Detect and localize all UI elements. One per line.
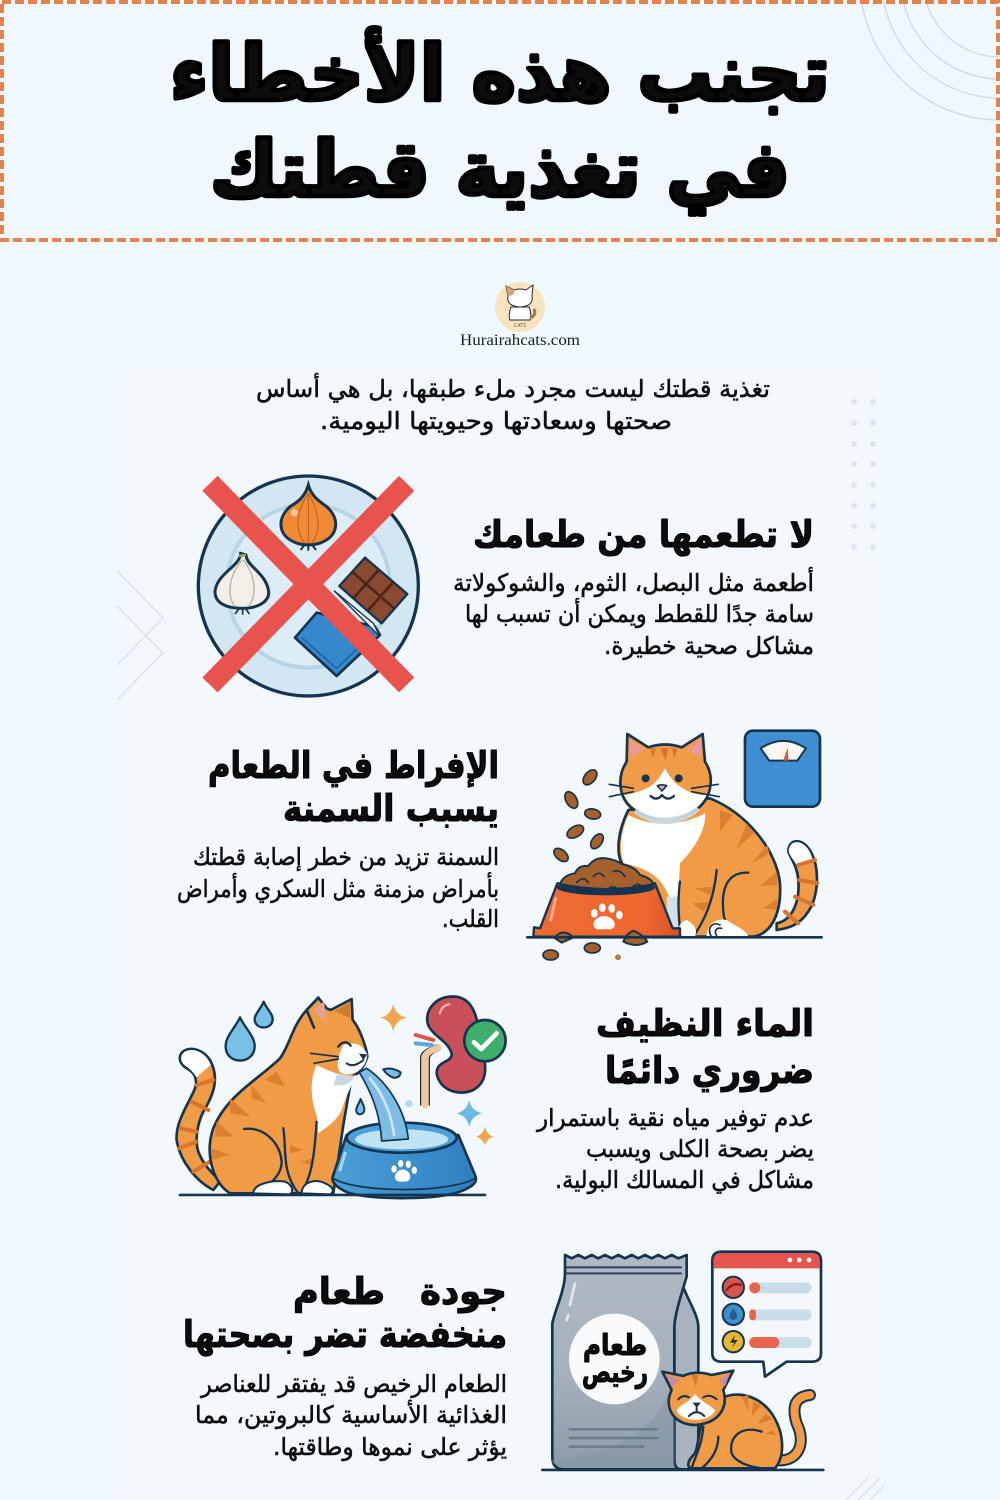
logo: CATS xyxy=(514,323,526,329)
floor line xyxy=(180,1191,485,1199)
panel 2: overfeeding text: السمنة تزيد من خطر إصابة قطتك xyxy=(193,843,499,872)
header banner with dashed border xyxy=(2,2,998,240)
cat tail xyxy=(777,841,817,930)
logo xyxy=(460,282,580,349)
panel 3: clean water text: مشاكل في المسالك البولية. xyxy=(555,1166,814,1194)
panel 3: clean water text: الماء النظيف xyxy=(596,1002,814,1045)
icon: garlic xyxy=(215,553,269,615)
cat tail xyxy=(177,1049,220,1190)
panel 2: overfeeding text: الإفراط في الطعام xyxy=(208,744,499,788)
icon: weighing scale xyxy=(745,731,820,807)
water drops xyxy=(226,1002,273,1061)
cat body xyxy=(618,798,780,937)
falling kibble xyxy=(543,767,606,960)
food bag xyxy=(552,1255,698,1469)
intro text: صحتها وسعادتها وحيويتها اليومية. xyxy=(320,407,672,435)
floor line xyxy=(542,1466,823,1474)
title xyxy=(170,27,830,215)
panel 1: do not feed: لا تطعمها من طعامك xyxy=(473,513,814,556)
illustration: cheap food bag and sad cat xyxy=(542,1252,823,1470)
title: تجنب هذه الأخطاء xyxy=(170,27,830,119)
bag label: طعام xyxy=(583,1328,647,1362)
water bowl xyxy=(332,1123,476,1198)
panel 1: do not feed: مشاكل صحية خطيرة. xyxy=(604,632,814,660)
cat body xyxy=(688,1395,782,1468)
panel 1: do not feed: أطعمة مثل البصل، الثوم، والشوكولاتة xyxy=(453,567,814,597)
intro text xyxy=(256,373,770,435)
cat head xyxy=(609,734,719,824)
panel 2: overfeeding text: القلب. xyxy=(442,905,499,933)
panel 4: low quality food text: الغذائية الأساسية كالبروتين، مما xyxy=(195,1400,507,1429)
panel 1: do not feed: سامة جدًا للقطط ويمكن أن تسبب لها xyxy=(465,598,814,628)
logo: Hurairahcats.com xyxy=(460,332,580,349)
icon: chocolate bar xyxy=(339,558,407,623)
icon: blue wrapper xyxy=(295,613,380,676)
panel 4: low quality food text: يؤثر على نموها وطاقتها. xyxy=(273,1433,507,1461)
panel 4: low quality food text: الطعام الرخيص قد يفتقر للعناصر xyxy=(200,1370,507,1398)
bag label xyxy=(582,1328,648,1389)
sparkles xyxy=(380,1003,494,1146)
illustration: crossed-out plate of toxic foods xyxy=(198,476,418,696)
red cross xyxy=(210,483,407,685)
cat tail xyxy=(775,1395,810,1460)
panel 2: overfeeding text: بأمراض مزمنة مثل السكري وأمراض xyxy=(177,872,499,903)
panel 3: clean water text: ضروري دائمًا xyxy=(605,1049,814,1092)
illustration: overweight cat with food bowl and scale xyxy=(527,731,822,960)
panel 4: low quality food text xyxy=(183,1270,507,1461)
panel 3: clean water text xyxy=(536,1002,814,1194)
water stream xyxy=(359,1068,408,1141)
icon: onion xyxy=(281,485,336,551)
cat body xyxy=(210,998,367,1193)
panel 3: clean water text: عدم توفير مياه نقية باستمرار xyxy=(536,1104,814,1132)
food bowl xyxy=(533,858,680,945)
sad cat head xyxy=(662,1371,733,1425)
panel 2: overfeeding text: يسبب السمنة xyxy=(283,787,499,830)
panel 4: low quality food text: جودة xyxy=(420,1270,507,1313)
bag label: رخيص xyxy=(582,1355,648,1389)
icon: kidney with check badge xyxy=(416,997,506,1105)
panel 4: low quality food text: منخفضة تضر بصحتها xyxy=(183,1313,507,1356)
floor line xyxy=(527,933,822,941)
panel 2: overfeeding text xyxy=(177,744,499,933)
panel 3: clean water text: يضر بصحة الكلى ويسبب xyxy=(586,1135,814,1163)
panel 1: do not feed xyxy=(453,513,814,660)
icon: nutrition chart bubble xyxy=(712,1252,821,1377)
panel 4: low quality food text: طعام xyxy=(293,1270,385,1314)
intro text: تغذية قطتك ليست مجرد ملء طبقها، بل هي أساس xyxy=(256,373,770,403)
illustration: cat drinking water, kidney xyxy=(177,997,506,1198)
title: في تغذية قطتك xyxy=(210,126,790,215)
